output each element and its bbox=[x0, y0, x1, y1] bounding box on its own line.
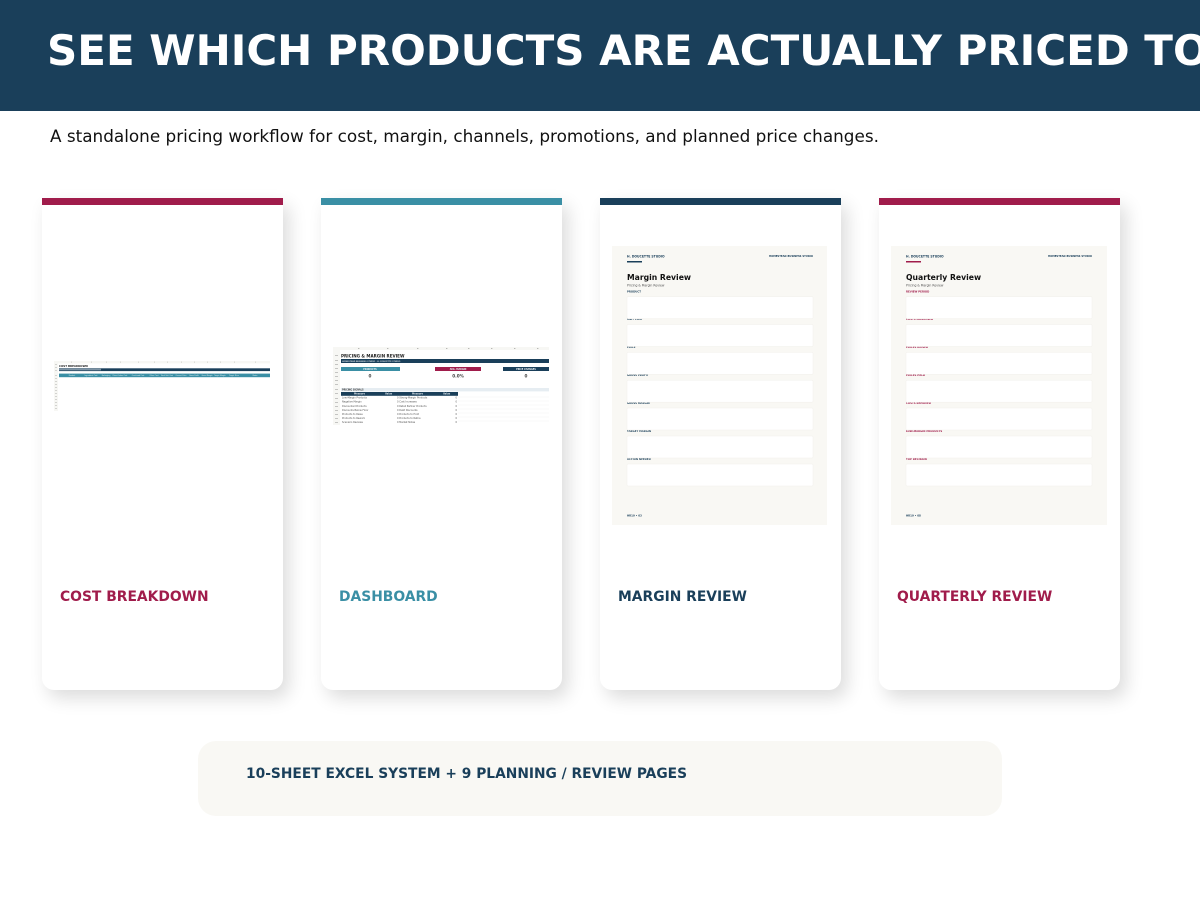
spreadsheet preview: dashboard: 0 bbox=[455, 413, 457, 416]
page preview: margin review: H. DOUCETTE STUDIO bbox=[627, 254, 665, 258]
spreadsheet preview: dashboard: PRICING & MARGIN REVIEW bbox=[341, 354, 405, 358]
page preview: margin review: HR19 • 03 bbox=[627, 514, 642, 518]
spreadsheet preview: dashboard: Products to Raise bbox=[342, 413, 363, 416]
page preview: quarterly review: PRICES RAISED bbox=[906, 345, 929, 349]
page preview: margin review: GROSS MARGIN bbox=[627, 401, 650, 405]
page preview: margin review: TARGET MARGIN bbox=[627, 429, 651, 433]
spreadsheet preview: dashboard: 0 Debt Discounts bbox=[397, 409, 418, 412]
spreadsheet preview: dashboard: 0 bbox=[369, 374, 372, 379]
spreadsheet preview: dashboard: Measure bbox=[354, 393, 366, 396]
card label: DASHBOARD bbox=[339, 589, 438, 605]
spreadsheet preview: cost breakdown: Target Margin bbox=[214, 374, 226, 377]
spreadsheet preview: dashboard: 0.0% bbox=[452, 374, 465, 379]
title: SEE WHICH PRODUCTS ARE ACTUALLY PRICED TO bbox=[47, 26, 1200, 75]
spreadsheet preview: cost breakdown: Overhead Cost bbox=[132, 374, 145, 377]
page preview: quarterly review: HR19 • 08 bbox=[906, 514, 921, 518]
spreadsheet preview: cost breakdown: Direct Labor Cost bbox=[113, 374, 128, 377]
spreadsheet preview: dashboard: PRICE CHANGES bbox=[516, 368, 536, 371]
page preview: quarterly review: COSTS REMOVED bbox=[906, 401, 932, 405]
spreadsheet preview: dashboard: HOMESTEAD BUSINESS STUDIO · H. DOUCETTE STUDIO bbox=[342, 361, 401, 363]
page preview: margin review bbox=[612, 246, 827, 525]
page preview: margin review: ACTION NEEDED bbox=[627, 457, 652, 461]
spreadsheet preview: dashboard: Discounted Products bbox=[342, 405, 367, 408]
spreadsheet preview: cost breakdown bbox=[54, 361, 270, 411]
spreadsheet preview: dashboard: AVG. MARGIN bbox=[450, 368, 466, 371]
panel: dashboard bbox=[321, 198, 562, 690]
spreadsheet preview: cost breakdown: Gross Profit bbox=[189, 374, 199, 377]
spreadsheet preview: dashboard: 0 bbox=[455, 401, 457, 404]
spreadsheet preview: cost breakdown: Notes bbox=[253, 374, 258, 377]
spreadsheet preview: dashboard: 0 bbox=[525, 374, 528, 379]
page preview: margin review: PRICE bbox=[627, 345, 636, 349]
page preview: margin review: Pricing & Margin Review bbox=[627, 283, 665, 287]
header banner bbox=[0, 0, 1200, 111]
spreadsheet preview: dashboard: Scenario Reviews bbox=[342, 421, 364, 424]
spreadsheet preview: dashboard: Value bbox=[443, 393, 451, 396]
spreadsheet preview: dashboard: Products to Rework bbox=[342, 417, 366, 420]
page preview: margin review: Margin Review bbox=[627, 273, 691, 282]
spreadsheet preview: dashboard: 0 Strong-Margin Products bbox=[397, 397, 428, 400]
spreadsheet preview: dashboard: 0 Products to Hold bbox=[397, 413, 419, 416]
panel: quarterly review bbox=[879, 198, 1120, 690]
page preview: margin review: UNIT COST bbox=[627, 317, 643, 321]
spreadsheet preview: cost breakdown: Current Price bbox=[176, 374, 186, 377]
spreadsheet preview: cost breakdown: COST BREAKDOWN bbox=[59, 364, 88, 368]
spreadsheet preview: dashboard: Measure bbox=[412, 393, 424, 396]
spreadsheet preview: cost breakdown: Ingredient Cost bbox=[85, 374, 98, 377]
page preview: quarterly review: PRICES HELD bbox=[906, 373, 926, 377]
subtitle: A standalone pricing workflow for cost, margin, channels, promotions, and planned price changes. bbox=[50, 126, 879, 146]
spreadsheet preview: dashboard: Low-Margin Products bbox=[342, 397, 368, 400]
spreadsheet preview: cost breakdown: Gross Margin bbox=[201, 374, 213, 377]
callout: system summary bbox=[198, 741, 1002, 816]
page preview: quarterly review: H. DOUCETTE STUDIO bbox=[906, 254, 944, 258]
card label: MARGIN REVIEW bbox=[618, 589, 747, 605]
callout: system summary: 10-SHEET EXCEL SYSTEM + 9 PLANNING / REVIEW PAGES bbox=[246, 766, 687, 782]
spreadsheet preview: dashboard: PRODUCTS bbox=[363, 368, 377, 371]
spreadsheet preview: cost breakdown: Packaging bbox=[102, 375, 110, 377]
page preview: margin review: GROSS PROFIT bbox=[627, 373, 649, 377]
panel: margin review bbox=[600, 198, 841, 690]
spreadsheet preview: dashboard: 0 bbox=[455, 405, 457, 408]
panel: cost breakdown bbox=[42, 198, 283, 690]
card label: QUARTERLY REVIEW bbox=[897, 589, 1052, 605]
spreadsheet preview: cost breakdown: Target Price bbox=[229, 374, 239, 377]
spreadsheet preview: cost breakdown: Product bbox=[69, 374, 76, 377]
page preview: quarterly review: COSTS INCREASED bbox=[906, 317, 934, 321]
page preview: quarterly review: Pricing & Margin Review bbox=[906, 283, 944, 287]
spreadsheet preview: dashboard: 0 Market Notes bbox=[397, 421, 416, 424]
spreadsheet preview: dashboard: 0 bbox=[455, 421, 457, 424]
page preview: quarterly review: TOP DECISION bbox=[906, 457, 927, 461]
spreadsheet preview: dashboard: 0 Cost Increases bbox=[397, 401, 417, 404]
page preview: quarterly review bbox=[891, 246, 1107, 525]
spreadsheet preview: dashboard: 0 bbox=[455, 397, 457, 400]
spreadsheet preview: dashboard: Discounts Below Floor bbox=[342, 409, 368, 412]
spreadsheet preview: cost breakdown: Other Cost bbox=[149, 374, 159, 377]
page preview: quarterly review: HOMESTEAD BUSINESS STUDIO bbox=[1048, 254, 1092, 258]
page preview: quarterly review: LOW-MARGIN PRODUCTS bbox=[906, 429, 942, 433]
page preview: quarterly review: Quarterly Review bbox=[906, 273, 981, 282]
spreadsheet preview: dashboard: 0 bbox=[455, 409, 457, 412]
page preview: quarterly review: REVIEW PERIOD bbox=[906, 289, 930, 293]
spreadsheet preview: dashboard: 0 Retail Partner Products bbox=[397, 405, 427, 408]
spreadsheet preview: cost breakdown: Total Unit Cost bbox=[161, 374, 173, 377]
page preview: margin review: PRODUCT bbox=[627, 289, 641, 293]
spreadsheet preview: dashboard: 0 Products to Retire bbox=[397, 417, 421, 420]
page preview: margin review: HOMESTEAD BUSINESS STUDIO bbox=[769, 254, 813, 258]
spreadsheet preview: dashboard: Value bbox=[385, 393, 393, 396]
spreadsheet preview: dashboard: PRICING SIGNALS bbox=[342, 388, 364, 392]
card label: COST BREAKDOWN bbox=[60, 589, 209, 605]
spreadsheet preview: dashboard: Negative Margin bbox=[342, 401, 362, 404]
spreadsheet preview: dashboard: 0 bbox=[455, 417, 457, 420]
spreadsheet preview: dashboard bbox=[333, 347, 549, 425]
